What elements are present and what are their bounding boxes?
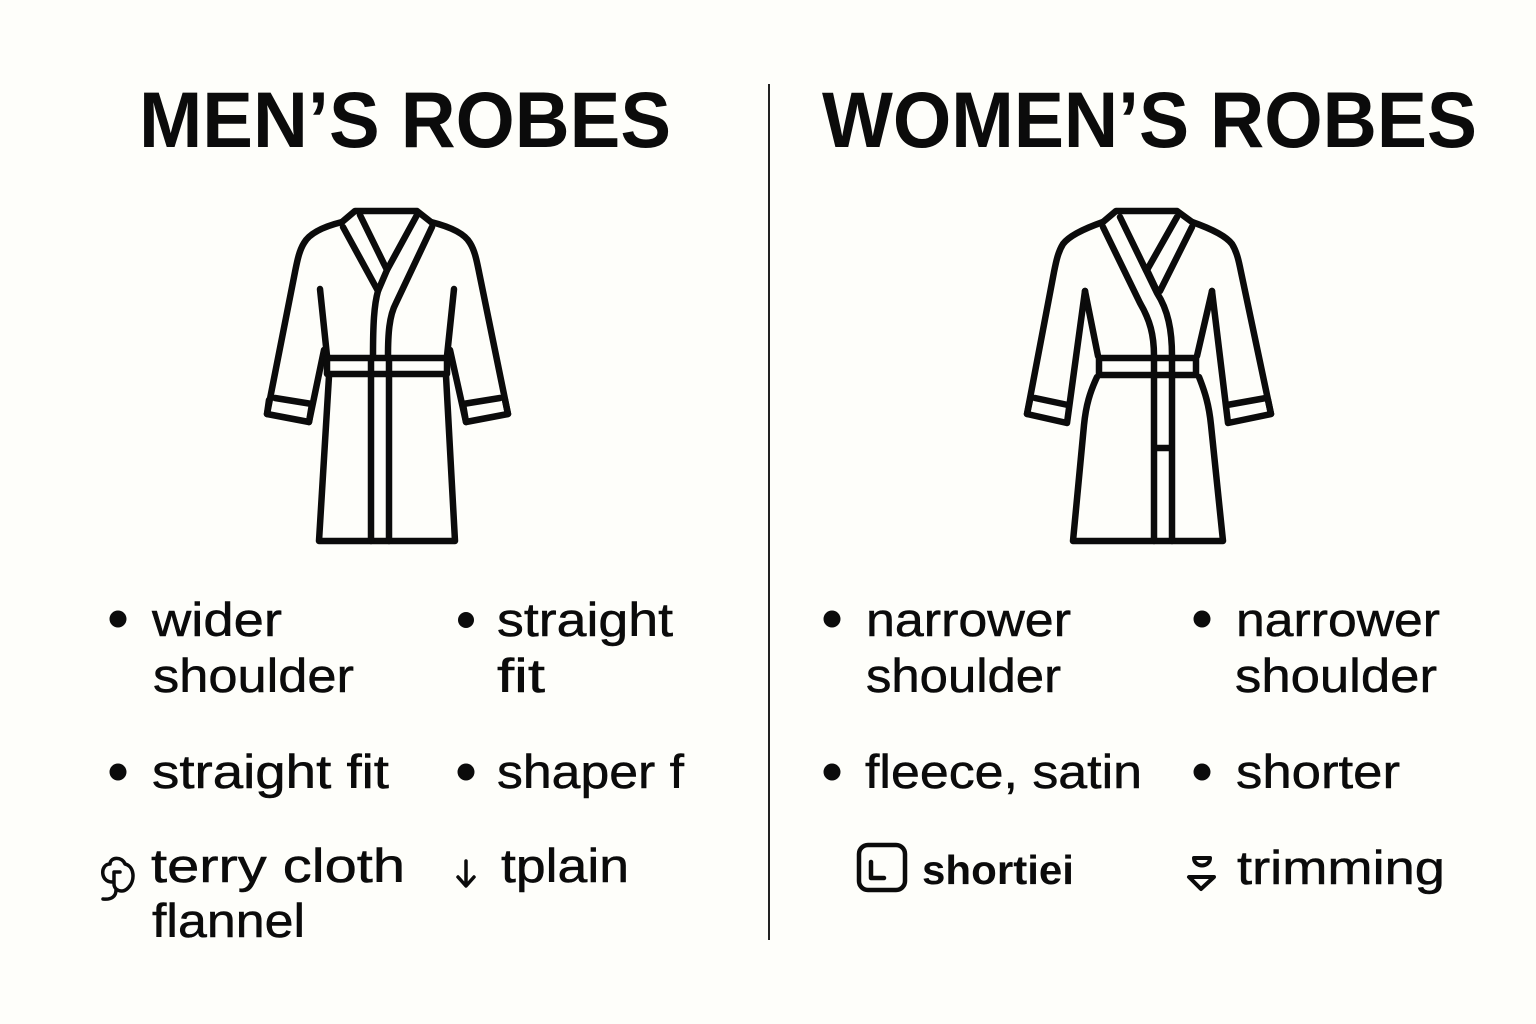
bullet: narrower shoulder right [1194,593,1440,702]
icon: rounded square with L [859,845,905,890]
icon: women's robe [1027,211,1271,541]
heading: women's robes: WOMEN’S ROBES [822,75,1477,164]
icon: trim marker [1189,858,1214,889]
bullet: straight fit [458,593,673,702]
bullet: straight fit: straight [497,593,673,646]
bullet: narrower shoulder left [824,593,1071,702]
bullet: terry cloth flannel: flannel [152,894,305,947]
bullet: terry cloth flannel [151,839,405,947]
heading: men's robes: MEN’S ROBES [139,75,671,164]
bullet: shorter: shorter [1236,745,1400,798]
bullet: straight fit: fit [497,649,545,702]
bullet: narrower shoulder right: shoulder [1235,649,1437,702]
bullet: narrower shoulder right: narrower [1236,593,1440,646]
bullet: narrower shoulder left: narrower [866,593,1071,646]
icon: fabric swirl [103,858,133,899]
bullet: straight fit second: straight fit [152,745,389,798]
icon: down arrow [458,861,474,886]
bullet: shaper f: shaper f [497,745,685,798]
label: shortiei: shortiei [922,847,1074,893]
bullet: terry cloth flannel: terry cloth [151,839,405,892]
icon: men's robe [267,211,508,541]
bullet: wider shoulder [110,593,354,702]
bullet: wider shoulder: wider [151,593,282,646]
panel: women's robes [822,75,1477,894]
label: trimming: trimming [1237,841,1445,894]
bullet: tplain: tplain [501,839,629,892]
bullet: wider shoulder: shoulder [153,649,354,702]
bullet: narrower shoulder left: shoulder [866,649,1061,702]
panel: men's robes [103,75,685,947]
bullet: fleece, satin: fleece, satin [865,745,1142,798]
